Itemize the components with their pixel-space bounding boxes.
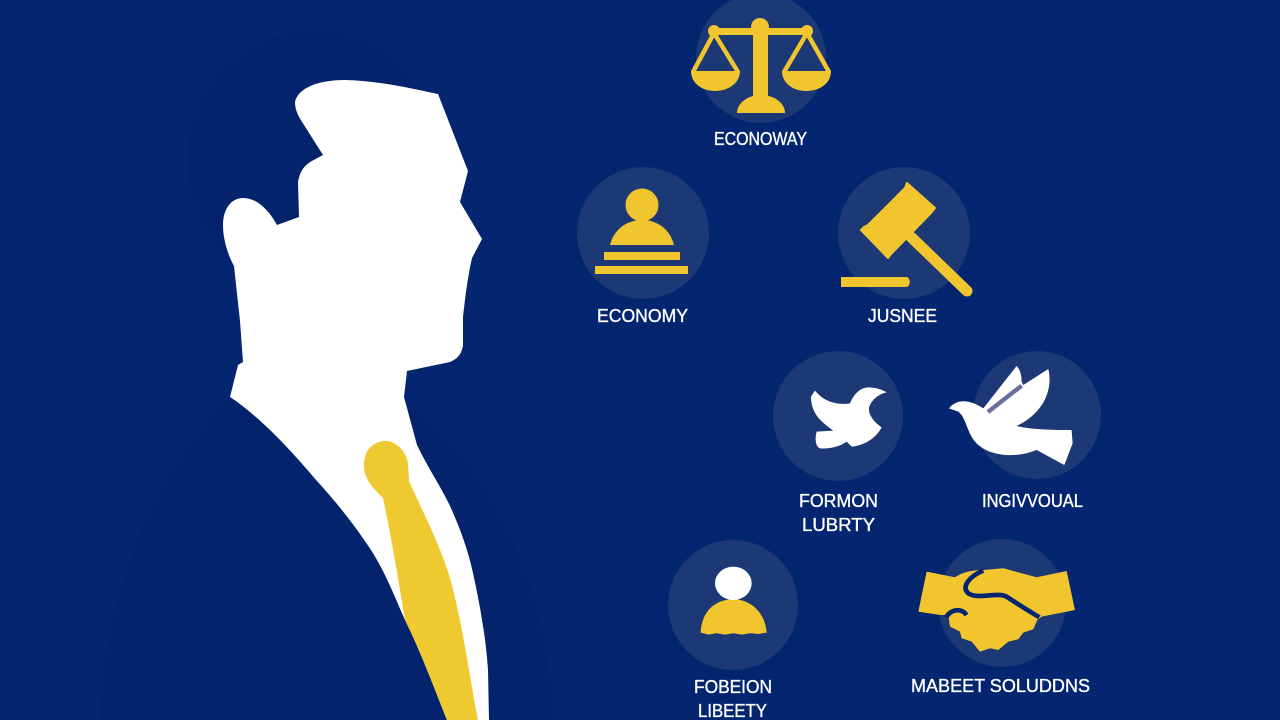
icon backdrop circle (773, 351, 903, 481)
icon: person on podium (595, 188, 688, 274)
label: JUSNEE (868, 306, 937, 326)
icon backdrop circle (577, 167, 709, 299)
icon: small dove (811, 387, 887, 449)
icon: handshake (918, 568, 1075, 652)
item: individual dove (949, 351, 1101, 511)
item: scales of justice (691, 0, 831, 149)
item: freedom dove (773, 351, 903, 535)
label: INGIVVOUAL (982, 491, 1083, 511)
icon: large dove (949, 366, 1073, 465)
icon backdrop circle (938, 539, 1066, 667)
icon: gavel (841, 183, 967, 291)
label (694, 677, 772, 720)
label (799, 491, 878, 535)
label: MABEET SOLUDDNS (911, 676, 1090, 696)
item: economy (577, 167, 709, 326)
item: foreign liberty (668, 540, 798, 720)
necktie (364, 441, 478, 720)
jacket shadow (100, 397, 552, 720)
label: ECONOWAY (714, 129, 807, 149)
item: market solutions (911, 539, 1090, 696)
item: justice (838, 167, 970, 326)
label: ECONOMY (597, 306, 688, 326)
icon: person bust (701, 567, 767, 635)
label: LUBRTY (802, 515, 875, 535)
label: FOBEION (694, 677, 772, 697)
icon backdrop circle (838, 167, 970, 299)
icon backdrop circle (696, 0, 826, 123)
icon: balance scales (691, 18, 831, 113)
label: FORMON (799, 491, 878, 511)
icon backdrop circle (973, 351, 1101, 479)
icon backdrop circle (668, 540, 798, 670)
figure: man in profile silhouette (100, 80, 552, 720)
head and shirt silhouette (223, 80, 489, 720)
